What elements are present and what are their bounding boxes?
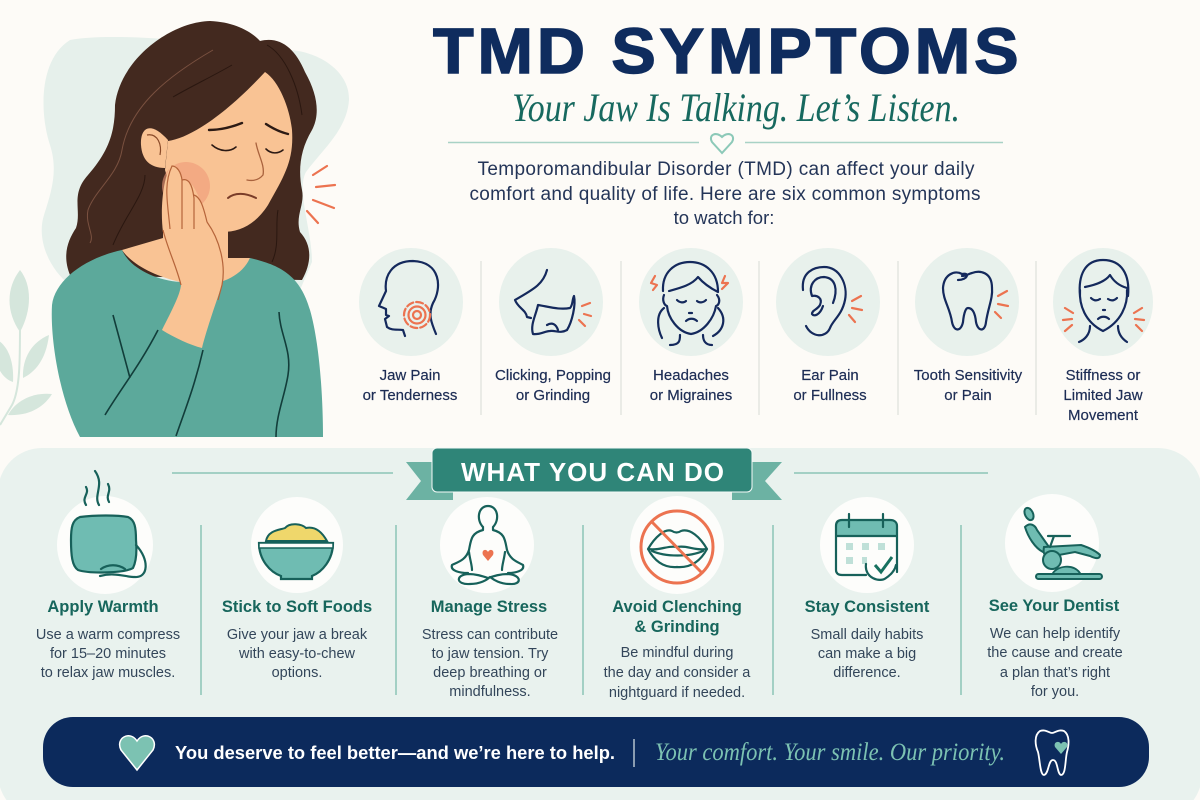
symptom: tooth sensitivity: or Pain <box>944 387 992 404</box>
plant decoration <box>0 270 52 425</box>
symptom: jaw pain: or Tenderness <box>363 387 457 404</box>
panel: what you can do <box>0 448 1200 800</box>
action dividers <box>201 525 961 695</box>
symptom: stiffness <box>1053 248 1153 424</box>
action: soft foods: options. <box>272 665 322 681</box>
symptom: stiffness: Limited Jaw <box>1063 387 1143 404</box>
banner heading <box>406 448 782 500</box>
heart divider <box>448 134 1003 153</box>
action: manage stress: Stress can contribute <box>422 627 558 643</box>
banner heading: WHAT YOU CAN DO <box>461 457 724 487</box>
ear <box>141 128 168 168</box>
footer banner <box>43 717 1149 787</box>
action: stay consistent: difference. <box>833 665 901 681</box>
footer message: You deserve to feel better—and we’re here to help. <box>175 743 615 763</box>
symptom: tooth sensitivity: Tooth Sensitivity <box>914 367 1023 384</box>
symptom: headaches <box>639 248 743 404</box>
action: avoid clenching: Avoid Clenching <box>612 598 742 616</box>
action: apply warmth <box>36 471 180 681</box>
symptom: clicking: Clicking, Popping <box>495 367 611 384</box>
pain lines near face <box>307 166 335 223</box>
symptom: stiffness: Stiffness or <box>1066 367 1140 384</box>
footer tagline: Your comfort. Your smile. Our priority. <box>655 739 1005 766</box>
symptom: tooth sensitivity <box>914 248 1023 404</box>
title: TMD SYMPTOMS <box>433 15 1018 87</box>
action: apply warmth: for 15–20 minutes <box>50 646 166 662</box>
neck <box>122 225 250 285</box>
action: manage stress <box>422 497 558 700</box>
action: stay consistent <box>805 497 930 681</box>
action: see dentist: for you. <box>1031 684 1079 700</box>
symptom dividers <box>481 261 1036 415</box>
action: stay consistent: can make a big <box>818 646 916 662</box>
intro paragraph: to watch for: <box>674 207 774 228</box>
symptom: ear pain <box>776 248 880 404</box>
icon: tooth <box>1036 730 1069 775</box>
background blob <box>42 37 349 290</box>
action: soft foods: Stick to Soft Foods <box>222 598 372 616</box>
illustration: woman holding jaw <box>52 21 323 437</box>
action: soft foods: with easy-to-chew <box>238 646 356 662</box>
symptom: ear pain: or Fullness <box>793 387 867 404</box>
action: see dentist: the cause and create <box>987 645 1123 661</box>
action: manage stress: Manage Stress <box>431 598 547 616</box>
symptom: headaches: Headaches <box>653 367 729 384</box>
action: avoid clenching: the day and consider a <box>604 665 751 681</box>
action: apply warmth: Apply Warmth <box>47 598 159 616</box>
symptom: jaw pain <box>359 248 463 404</box>
action: see dentist <box>987 494 1123 700</box>
action: apply warmth: to relax jaw muscles. <box>41 665 175 681</box>
facial features <box>209 123 288 198</box>
action: manage stress: mindfulness. <box>449 684 531 700</box>
symptom: clicking: or Grinding <box>516 387 590 404</box>
sweater <box>52 250 323 437</box>
action: stay consistent: Stay Consistent <box>805 598 930 616</box>
action: avoid clenching: & Grinding <box>634 618 720 636</box>
hair <box>66 21 317 280</box>
action: see dentist: We can help identify <box>990 626 1121 642</box>
icon: heart <box>120 736 154 770</box>
face <box>165 72 292 232</box>
symptom: ear pain: Ear Pain <box>801 367 859 384</box>
action: see dentist: a plan that’s right <box>1000 665 1110 681</box>
action: soft foods: Give your jaw a break <box>227 627 368 643</box>
action: stay consistent: Small daily habits <box>811 627 923 643</box>
action: avoid clenching: Be mindful during <box>621 645 733 661</box>
action: manage stress: deep breathing or <box>433 665 547 681</box>
subtitle: Your Jaw Is Talking. Let’s Listen. <box>512 85 960 130</box>
symptom: headaches: or Migraines <box>650 387 732 404</box>
action: manage stress: to jaw tension. Try <box>432 646 549 662</box>
symptom: jaw pain: Jaw Pain <box>380 367 440 384</box>
intro paragraph <box>470 159 980 228</box>
symptom: clicking <box>495 248 611 404</box>
banner lines <box>172 472 988 474</box>
intro paragraph: comfort and quality of life. Here are six common symptoms <box>470 184 980 205</box>
action: avoid clenching <box>604 496 751 701</box>
action: avoid clenching: nightguard if needed. <box>609 685 745 701</box>
hand <box>162 165 223 348</box>
action: see dentist: See Your Dentist <box>989 597 1120 615</box>
action: apply warmth: Use a warm compress <box>36 627 180 643</box>
symptom: stiffness: Movement <box>1068 407 1139 424</box>
redness on jaw <box>162 162 210 210</box>
action: soft foods <box>222 497 372 681</box>
intro paragraph: Temporomandibular Disorder (TMD) can affect your daily <box>478 159 975 180</box>
